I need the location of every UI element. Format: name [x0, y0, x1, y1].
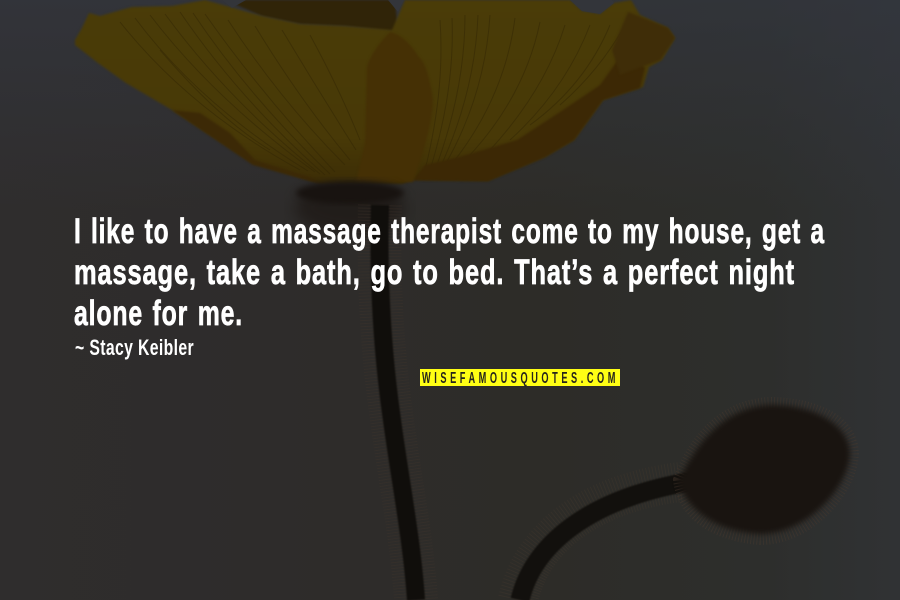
quote text: alone for me. — [74, 294, 243, 333]
petal veins — [120, 12, 625, 175]
quote text — [74, 212, 825, 333]
flower bud on curved stem — [518, 404, 852, 600]
main petals — [75, 0, 675, 184]
bud body — [678, 405, 850, 534]
flower: yellow poppy — [75, 0, 675, 184]
back petals at the top — [225, 0, 398, 32]
bud stem — [518, 480, 700, 600]
central petal — [356, 32, 433, 182]
flower calyx — [295, 182, 405, 234]
right torn petal tip — [612, 12, 675, 75]
dark lower left petal edge — [172, 110, 321, 184]
main flower stem — [380, 205, 416, 600]
dark lower right petal edge — [413, 50, 645, 181]
watermark badge — [420, 369, 620, 387]
watermark badge: WISEFAMOUSQUOTES.COM — [422, 370, 619, 387]
bud hairs — [680, 404, 852, 538]
quote attribution: ~ Stacy Keibler — [75, 335, 194, 360]
sky gaps at the top of the flower — [222, 0, 614, 14]
